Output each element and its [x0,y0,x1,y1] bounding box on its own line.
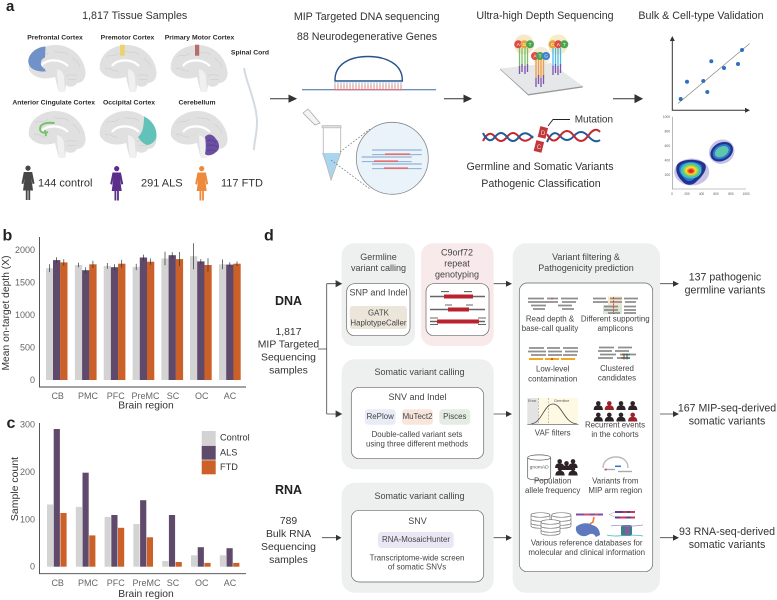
text: variant classes: Germline and Somatic Variants [466,161,614,173]
filter: recurrent events: in the cohorts [591,430,639,439]
panel: germline variant calling: variant calling [351,263,406,273]
chart: density flow plot: 400 [665,158,670,162]
bars [46,255,241,380]
x tick labels: PMC [78,578,98,588]
arrow [613,95,642,102]
axes [40,237,246,387]
chart: density flow plot: 600 [665,144,670,148]
filter: population allele frequency: Population [534,476,571,485]
legend [202,431,250,474]
cohort: control: 144 control [38,178,92,190]
x tick labels: PreMC [132,578,161,588]
icon: sequencing flow cell: T [529,42,532,47]
filter: low-level contamination: contamination [528,374,577,383]
RNA input [261,483,316,566]
panel: RNA somatic variant calling: of somatic SNVs [388,563,446,572]
x tick labels: SC [167,391,180,401]
filter: MIP arm region: MIP arm region [588,486,642,495]
RNA input: Bulk RNA [266,529,311,540]
icon: DNA helix with mutation: Mutation [575,115,613,126]
panel: variant filtering and pathogenicity prediction [513,243,660,593]
filter: population allele frequency: allele frequency [525,486,580,495]
chart: density flow plot: 400 [699,192,704,196]
brain: anterior cingulate cortex [12,100,95,158]
axes [40,423,246,574]
icon: tube with magnified reads [303,109,428,194]
filter: supporting amplicons: amplicons [598,324,633,333]
icon: sequencing flow cell: A [533,54,537,59]
y tick labels [15,245,35,385]
panel: variant filtering and pathogenicity prediction: Variant filtering & [552,252,620,262]
legend: Control [220,432,250,442]
filter: VAF: Error [528,399,537,403]
label b: b [2,228,12,244]
brain: occipital cortex [100,100,157,158]
RNA input: Sequencing [261,542,316,553]
x tick labels: CB [51,578,64,588]
panel: C9orf72 repeat genotyping: genotyping [435,270,479,280]
chart: density flow plot: 200 [684,192,690,196]
DNA input: MIP Targeted [258,340,319,350]
x-axis title: Brain region [118,589,174,600]
DNA input: 1,817 [275,327,302,338]
label c: c [6,415,16,432]
filter: population allele frequency [525,455,580,495]
output: MIP-seq somatic variants: somatic variants [689,415,765,427]
panel: variant filtering and pathogenicity prediction: Pathogenicity prediction [538,263,634,273]
panel: RNA somatic variant calling: Somatic variant calling [374,491,465,501]
filter: recurrent events: Recurrent events [585,421,645,430]
x tick labels: PMC [78,391,98,401]
heading: validation: Bulk & Cell-type Validation [638,10,764,22]
y tick labels: 500 [20,342,35,352]
heading: MIP targeted sequencing [294,11,440,43]
y tick labels: 1500 [15,278,35,288]
x tick labels: AC [224,391,237,401]
panel: DNA somatic variant calling [342,359,494,469]
output: MIP-seq somatic variants: 167 MIP-seq-derived [678,403,776,415]
panel b: on-target depth chart [1,228,246,412]
y tick labels: 0 [30,375,35,385]
panel: DNA somatic variant calling: Pisces [443,412,466,421]
filter: VAF: Germline [554,399,569,403]
brain: premotor cortex [100,34,157,92]
brain: premotor cortex: Premotor Cortex [101,34,155,42]
filter: low-level contamination [528,348,578,383]
filter: VAF [527,398,578,438]
filter: population allele frequency: gnomAD [530,464,549,470]
x tick labels [51,578,237,588]
panel a: study overview [6,0,764,200]
brain: anterior cingulate cortex: Anterior Cingulate Cortex [12,100,95,106]
y tick labels [20,419,35,572]
x tick labels: AC [224,578,237,588]
panel: DNA somatic variant calling: RePlow [367,412,394,421]
y-axis title: Mean on-target depth (X) [1,255,12,371]
filter: recurrent events [585,401,645,439]
panel c: sample count chart [6,415,250,600]
output: RNA-seq somatic variants [679,526,775,551]
panel: DNA somatic variant calling: Double-called variant sets [372,430,462,439]
panel: germline variant calling: GATK [368,308,390,318]
error bars [50,243,237,273]
brain: cerebellum: Cerebellum [178,100,216,106]
DNA input: Sequencing [261,352,316,364]
filter: VAF: VAF filters [535,429,571,438]
panel: DNA somatic variant calling: MuTect2 [403,412,432,421]
RNA input: RNA [275,483,302,497]
icon: sequencing flow cell [500,34,583,96]
brain: occipital cortex: Occipital Cortex [103,100,155,106]
output: pathogenic germline variants: 137 pathogenic [689,272,762,284]
x tick labels: OC [195,391,209,401]
DNA input: DNA [275,294,302,308]
cohort: ALS [110,166,183,200]
panel: C9orf72 repeat genotyping: repeat [444,259,470,269]
output: RNA-seq somatic variants: somatic variants [689,539,765,551]
panel: DNA somatic variant calling: using three different methods [366,440,468,449]
RNA input: 789 [280,516,297,527]
output: pathogenic germline variants [685,272,765,296]
x tick labels: CB [51,391,64,401]
icon: sequencing flow cell: T [539,54,542,59]
filter: supporting amplicons: Different supporting [581,314,650,323]
panel: RNA somatic variant calling: SNV [408,516,427,526]
connector: DNA to callers [318,284,336,414]
panel d: analysis workflow [258,228,776,593]
filter: low-level contamination: Low-level [536,365,570,374]
output: MIP-seq somatic variants [678,403,776,427]
label d: d [264,228,274,244]
x tick labels: PFC [107,391,125,401]
output: pathogenic germline variants: germline variants [685,284,765,296]
y tick labels: 300 [20,419,35,429]
chart: density flow plot: 1000 [663,115,670,119]
x tick labels: OC [195,578,209,588]
brain: primary motor cortex [165,34,234,92]
brain: primary motor cortex: Primary Motor Cortex [165,34,234,42]
x tick labels: PFC [107,578,125,588]
filter: reference databases: molecular and clinical information [528,548,645,557]
filter: supporting amplicons [581,296,650,333]
text: variant classes [466,161,614,190]
icon: sequencing flow cell: G [523,42,527,47]
filter: clustered candidates: candidates [598,374,636,382]
RNA input: samples [269,555,308,566]
DNA input: samples [269,366,308,376]
panel: RNA somatic variant calling [342,483,494,593]
icon: sequencing flow cell: C [551,42,555,47]
panel: C9orf72 repeat genotyping [421,243,494,346]
y tick labels: 2000 [15,245,35,255]
y tick labels: 1000 [15,310,35,320]
x tick labels: PreMC [131,391,160,401]
chart: density flow plot: 1000 [742,192,750,196]
icon: sequencing flow cell: A [517,42,521,47]
icon: sequencing flow cell: T [563,42,566,47]
cohort: ALS: 291 ALS [141,178,183,190]
DNA input [258,294,319,376]
legend: FTD [220,462,238,472]
brain: cerebellum [171,100,228,158]
brain: prefrontal cortex: Prefrontal Cortex [27,34,83,42]
icon: sequencing flow cell: A [557,42,561,47]
legend: ALS [220,447,237,457]
panel: germline variant calling: Germline [360,252,397,262]
x-axis title: Brain region [118,401,174,412]
panel: C9orf72 repeat genotyping: C9orf72 [441,248,473,258]
y tick labels: 100 [20,514,35,524]
heading: ultra-high depth sequencing: Ultra-high Depth Sequencing [476,10,614,22]
chart: density flow plot: 200 [665,173,670,177]
icon: DNA helix with mutation: D [541,131,546,137]
icon: DNA helix with mutation [483,115,613,153]
panel: germline variant calling: SNP and Indel [350,288,407,298]
cohort: FTD [195,166,263,200]
cohort: control [22,166,92,200]
chart: validation scatter plot [670,36,750,113]
bars [47,429,239,567]
panel: DNA somatic variant calling: SNV and Indel [388,392,447,402]
filter: MIP arm region [588,457,642,495]
filter: reference databases: Various reference databases for [531,538,643,547]
icon: sequencing flow cell: G [544,54,548,59]
chart: density flow plot: 800 [728,192,734,196]
filter: read depth [522,298,578,333]
filter: clustered candidates: Clustered [600,364,634,373]
filter: reference databases [528,512,645,557]
filter: read depth: base-call quality [522,324,578,333]
panel: RNA somatic variant calling: Transcriptome-wide screen [370,553,464,562]
x tick labels [51,391,237,401]
heading: MIP targeted sequencing: 88 Neurodegenerative Genes [297,31,437,43]
chart: density flow plot: 600 [713,192,719,196]
output: RNA-seq somatic variants: 93 RNA-seq-derived [679,526,775,538]
icon: DNA helix with mutation: C [537,145,542,151]
chart: density flow plot: 800 [665,130,670,134]
heading: tissue samples: 1,817 Tissue Samples [82,10,187,22]
cohort: FTD: 117 FTD [221,178,263,190]
panel: RNA somatic variant calling: RNA-MosaicHunter [382,535,450,544]
x tick labels: SC [167,578,180,588]
filter: read depth: Read depth & [526,314,575,323]
y tick labels: 0 [30,562,35,572]
panel: DNA somatic variant calling: Somatic variant calling [374,367,465,377]
brain: prefrontal cortex [27,34,86,92]
spinal cord: Spinal Cord [231,50,269,56]
arrows: flow between panels [322,281,679,541]
filter: MIP arm region: Variants from [592,476,639,485]
chart: density flow plot [663,115,750,196]
panel: germline variant calling: HaplotypeCaller [350,318,407,328]
text: variant classes: Pathogenic Classification [481,178,601,190]
y-axis title: Sample count [9,457,21,521]
arrow [270,95,296,102]
spinal cord [231,50,269,150]
y tick labels: 200 [20,467,35,477]
arrow [444,95,471,102]
panel: germline variant calling [342,243,415,346]
filter: clustered candidates [598,348,636,382]
heading: MIP targeted sequencing: MIP Targeted DNA sequencing [294,11,440,23]
icon: MIP probe [302,56,436,90]
chart: density flow plot: 0 [671,192,673,196]
